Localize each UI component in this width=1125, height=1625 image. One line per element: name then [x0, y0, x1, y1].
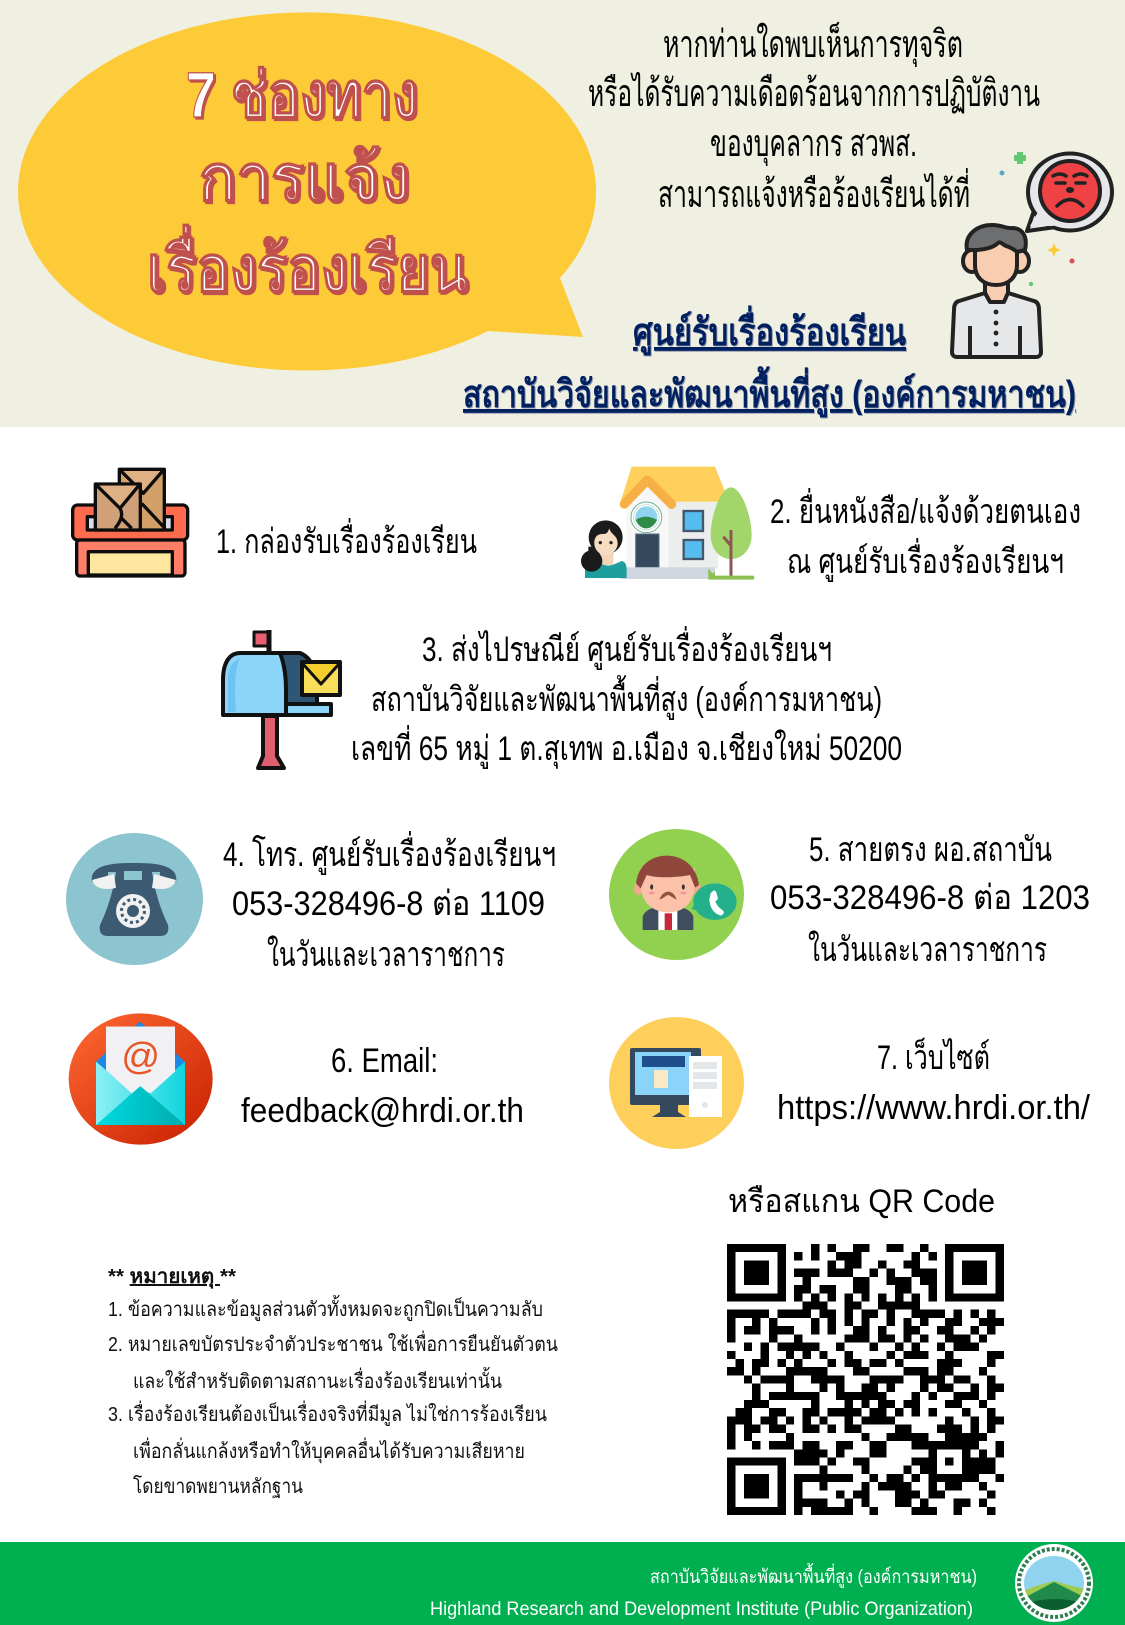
speech bubble — [18, 12, 596, 370]
text: channel 4: 053-328496-8 ต่อ 1109 — [232, 885, 545, 923]
text: channel 3: 3. ส่งไปรษณีย์ ศูนย์รับเรื่องร้องเรียนฯ — [422, 626, 832, 670]
text: channel 5: 5. สายตรง ผอ.สถาบัน — [809, 831, 1052, 869]
intro text: หากท่านใดพบเห็นการทุจริต — [663, 21, 963, 67]
text: channel 5 — [770, 831, 1090, 969]
icon: computer — [609, 1017, 744, 1149]
icon: upset person — [952, 152, 1112, 357]
channel 3: post — [223, 626, 902, 769]
text: channel 6 — [241, 1042, 524, 1130]
intro text: ของบุคลากร สวพส. — [710, 123, 917, 166]
QR caption: หรือสแกน QR Code — [728, 1183, 995, 1219]
text: channel 6: feedback@hrdi.or.th — [241, 1092, 524, 1130]
text: channel 4 — [223, 831, 556, 974]
title — [147, 59, 468, 305]
intro text: สามารถแจ้งหรือร้องเรียนได้ที่ — [658, 168, 970, 216]
notes: 3. เรื่องร้องเรียนต้องเป็นเรื่องจริงที่มีมูล ไม่ใช่การร้องเรียน — [108, 1400, 547, 1427]
intro text — [588, 21, 1040, 216]
channel 2: in person — [581, 467, 1081, 582]
notes: และใช้สำหรับติดตามสถานะเรื่องร้องเรียนเท่านั้น — [133, 1367, 502, 1393]
text: channel 7 — [777, 1037, 1091, 1127]
icon: mailbox — [223, 630, 340, 768]
text: channel 1: 1. กล่องรับเรื่องร้องเรียน — [216, 518, 477, 561]
QR code — [727, 1248, 1004, 1511]
title: เรื่องร้องเรียน — [147, 224, 468, 305]
title: การแจ้ง — [199, 142, 410, 214]
channel 7: website — [609, 1017, 1091, 1149]
panel: header — [0, 0, 1125, 427]
text: channel 3 — [351, 626, 902, 769]
icon: house and person — [581, 467, 754, 580]
footer Thai name: สถาบันวิจัยและพัฒนาพื้นที่สูง (องค์การมหาชน) — [650, 1563, 977, 1588]
text: channel 3: สถาบันวิจัยและพัฒนาพื้นที่สูง (องค์การมหาชน) — [371, 675, 882, 720]
channel 1: complaint box — [73, 469, 477, 576]
text: channel 5: 053-328496-8 ต่อ 1203 — [770, 879, 1090, 917]
icon: telephone — [66, 833, 203, 965]
notes: 2. หมายเลขบัตรประจำตัวประชาชน ใช้เพื่อการยืนยันตัวตน — [108, 1330, 558, 1356]
channel 5: director hotline — [609, 829, 1090, 969]
footer English name: Highland Research and Development Institute (Public Organization) — [430, 1599, 973, 1620]
text: channel 7: 7. เว็บไซต์ — [877, 1037, 990, 1077]
text: channel 6: 6. Email: — [331, 1042, 438, 1080]
text: channel 4: ในวันและเวลาราชการ — [267, 935, 505, 974]
footer band — [0, 1542, 1125, 1625]
logo — [1015, 1544, 1093, 1622]
notes — [108, 1266, 558, 1498]
icon: email envelope: @ — [121, 1035, 160, 1078]
icon: complaint box — [73, 469, 188, 576]
title: 7 ช่องทาง — [186, 59, 418, 131]
channel 4: telephone — [66, 831, 556, 974]
text: channel 7: https://www.hrdi.or.th/ — [777, 1089, 1091, 1127]
notes: ** หมายเหตุ ** — [108, 1266, 236, 1289]
notes: โดยขาดพยานหลักฐาน — [133, 1475, 303, 1498]
text: channel 2 — [770, 488, 1081, 582]
icon: email envelope — [69, 1013, 213, 1145]
text: channel 3: เลขที่ 65 หมู่ 1 ต.สุเทพ อ.เมือง จ.เชียงใหม่ 50200 — [351, 725, 902, 769]
channel 6: email — [69, 1013, 524, 1145]
notes: 1. ข้อความและข้อมูลส่วนตัวทั้งหมดจะถูกปิดเป็นความลับ — [108, 1295, 543, 1322]
text: channel 4: 4. โทร. ศูนย์รับเรื่องร้องเรียนฯ — [223, 831, 556, 875]
heading: complaint centre: ศูนย์รับเรื่องร้องเรียน — [633, 305, 906, 356]
icon: director with phone — [609, 829, 744, 960]
notes: เพื่อกลั่นแกล้งหรือทำให้บุคคลอื่นได้รับความเสียหาย — [133, 1437, 525, 1464]
